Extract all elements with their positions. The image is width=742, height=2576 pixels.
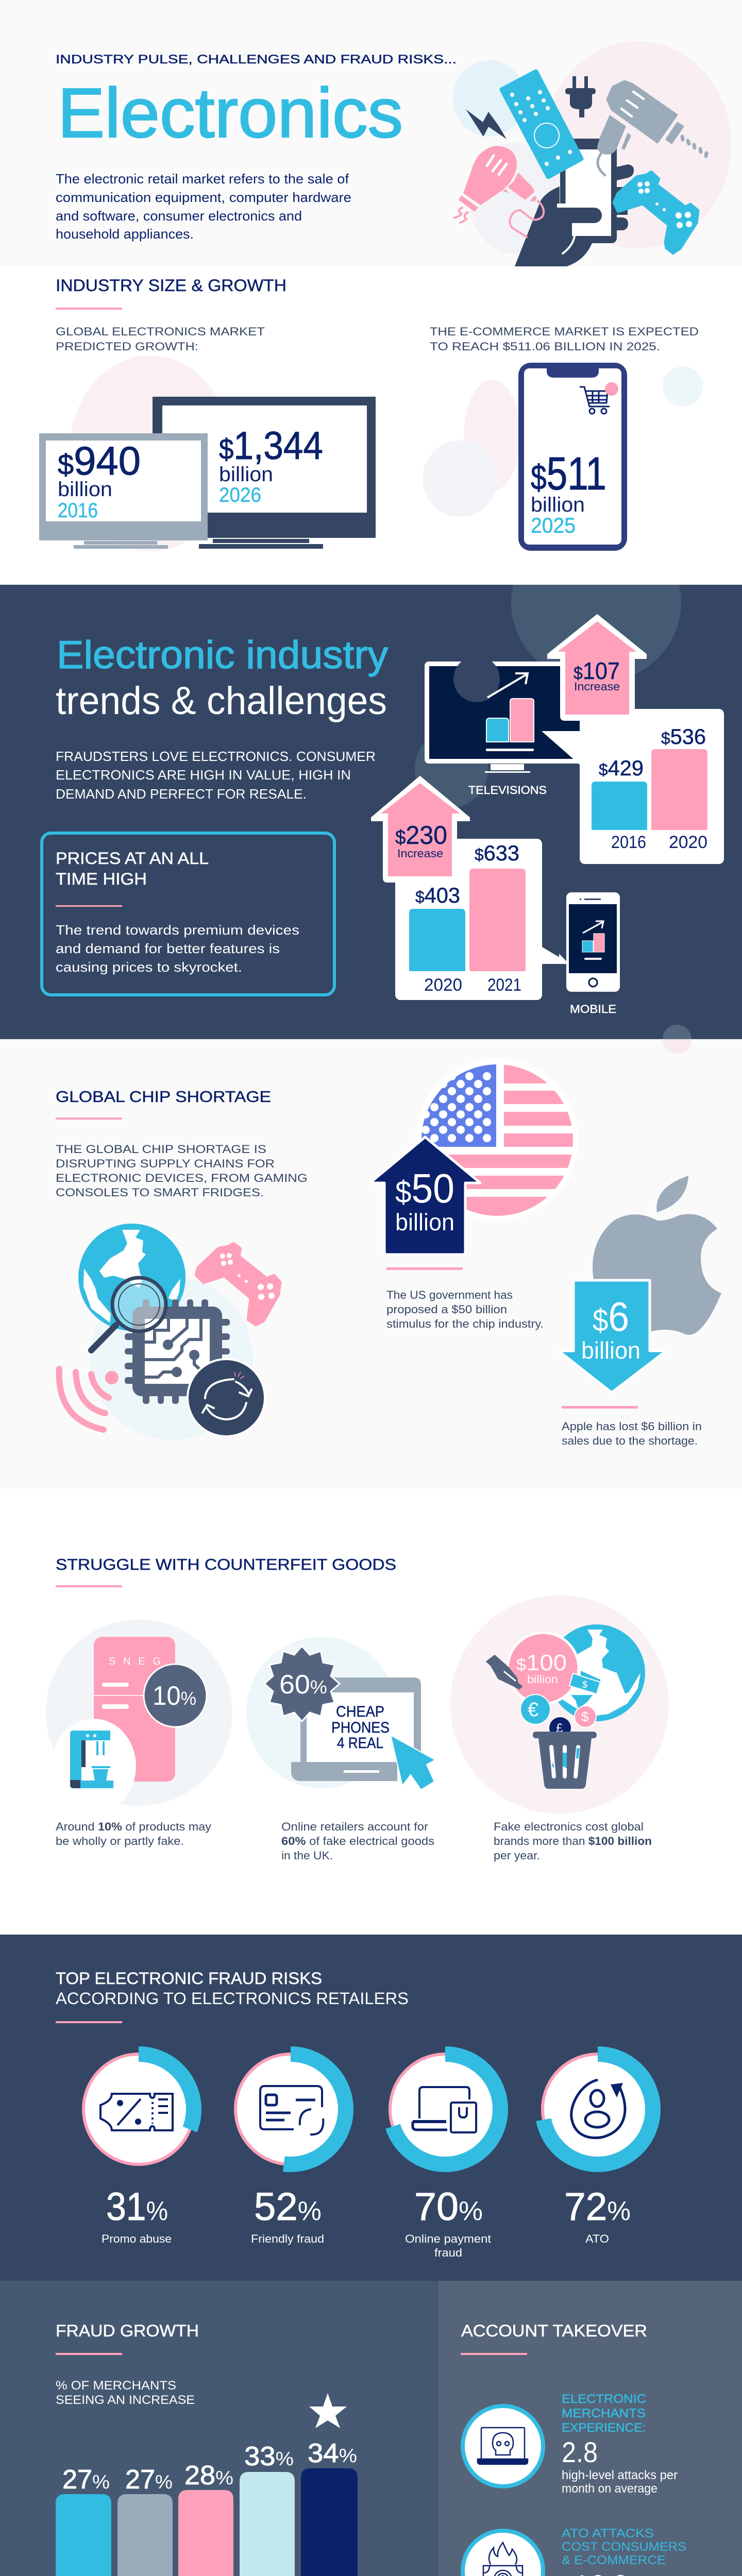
- bar: account takeover: [299, 2438, 358, 2576]
- right intro: THE E-COMMERCE MARKET IS EXPECTED: [430, 325, 699, 338]
- monitor 2026: [153, 397, 376, 549]
- illustration: fake online shop: 4 REAL: [337, 1735, 383, 1752]
- icon: television: TELEVISIONS: [468, 784, 547, 796]
- chart: television prices: $536: [661, 724, 706, 749]
- caption: 60 percent: [281, 1820, 434, 1862]
- arrow: 50 billion stimulus: $50: [395, 1165, 454, 1211]
- stat: high-level attacks: MERCHANTS: [562, 2406, 646, 2420]
- stat: cost of ATO: ATO ATTACKS: [562, 2527, 654, 2540]
- icon: shopping cart: [580, 387, 610, 414]
- bar: promo abuse: 28%: [184, 2461, 233, 2490]
- icon: devices: [413, 2087, 476, 2132]
- bar: refund abuse: [239, 2442, 295, 2576]
- section: trends and challenges: [0, 585, 742, 1039]
- heading: FRAUD GROWTH: [56, 2321, 199, 2340]
- monitor 2026: billion: [219, 463, 273, 486]
- icon: mobile phone: MOBILE: [570, 1003, 616, 1015]
- intro text: CONSOLES TO SMART FRIDGES.: [56, 1186, 264, 1199]
- icon: drill: [597, 81, 706, 175]
- stat: high-level attacks: EXPERIENCE:: [562, 2421, 646, 2435]
- intro text: [56, 1143, 308, 1199]
- icon: credit card: [260, 2086, 323, 2134]
- intro text: The electronic retail market refers to the sale of: [56, 171, 349, 187]
- caption: 100 billion: [494, 1820, 652, 1862]
- badge: 60 percent: [264, 1646, 340, 1721]
- phone illustration: $511: [531, 448, 606, 500]
- panel: prices at an all time high: [42, 833, 334, 995]
- caption: 60 percent: in the UK.: [281, 1849, 333, 1862]
- intro text: FRAUDSTERS LOVE ELECTRONICS. CONSUMER: [56, 749, 376, 764]
- arrow: 107 dollar increase: Increase: [574, 680, 620, 693]
- illustration: fake fridge: [46, 1619, 232, 1814]
- intro text: DISRUPTING SUPPLY CHAINS FOR: [56, 1157, 275, 1170]
- icon: bank note: [569, 1673, 600, 1694]
- icon: reload: [188, 1359, 265, 1436]
- arrow: 6 billion loss: [559, 1280, 666, 1393]
- coin: 100 billion: [508, 1633, 579, 1704]
- icon: controller: [195, 1243, 281, 1326]
- right intro: TO REACH $511.06 BILLION IN 2025.: [430, 340, 660, 353]
- stat: high-level attacks: month on average: [562, 2482, 657, 2496]
- heading: Electronic industry: [57, 633, 388, 677]
- stat: cost of ATO: & E-COMMERCE: [562, 2553, 666, 2567]
- coin: 100 billion: billion: [527, 1673, 558, 1686]
- icon: bank note: $: [582, 1680, 587, 1690]
- donut: ATO 72 percent: 72%: [564, 2185, 631, 2229]
- monitors illustration: [39, 355, 376, 551]
- bar: friendly fraud: 27%: [125, 2465, 173, 2495]
- chart: mobile prices: $633: [475, 841, 519, 865]
- donut: promo abuse 31 percent: 31%: [106, 2185, 168, 2229]
- intro text: [56, 749, 376, 802]
- monitor 2016: 2016: [58, 499, 98, 522]
- donut: online payment fraud 70 percent: fraud: [434, 2246, 462, 2259]
- caption: 100 billion: per year.: [494, 1849, 540, 1862]
- icon: plug: [565, 76, 596, 117]
- arrow: 6 billion loss: billion: [581, 1337, 640, 1364]
- panel: prices at an all time high: causing prices to skyrocket.: [56, 959, 242, 975]
- heading: ACCORDING TO ELECTRONICS RETAILERS: [56, 1989, 409, 2008]
- stat: high-level attacks: high-level attacks per: [562, 2468, 678, 2482]
- coin: 100 billion: $100: [516, 1650, 567, 1675]
- phone illustration: [423, 363, 703, 551]
- callout: stimulus text: The US government has: [386, 1289, 513, 1301]
- caption: 100 billion: brands more than $100 billion: [494, 1835, 652, 1848]
- icon: trash bin: [533, 1732, 597, 1789]
- stat: cost of ATO: COST CONSUMERS: [562, 2540, 686, 2554]
- donut: ATO 72 percent: ATO: [585, 2232, 609, 2245]
- icon: globe: [548, 1624, 645, 1721]
- subheading: % OF MERCHANTS: [56, 2379, 176, 2393]
- monitor 2016: $940: [58, 438, 141, 483]
- heading: [56, 1969, 409, 2023]
- callout: apple text: sales due to the shortage.: [562, 1434, 698, 1447]
- chip illustration: [59, 1224, 281, 1440]
- arrow: 50 billion stimulus: billion: [395, 1209, 454, 1235]
- callout: stimulus text: [386, 1267, 544, 1330]
- bar: refund abuse: 33%: [244, 2442, 294, 2471]
- icon: wifi waves: [59, 1369, 119, 1430]
- caption: 100 billion: Fake electronics cost global: [494, 1820, 644, 1833]
- badge: 60 percent: 60%: [279, 1670, 327, 1700]
- icon: microchip: [125, 1299, 230, 1404]
- panel: prices at an all time high: and demand for better features is: [56, 941, 280, 956]
- left intro: GLOBAL ELECTRONICS MARKET: [56, 325, 265, 338]
- illustration: fake online shop: [246, 1637, 435, 1790]
- subheading: [56, 2379, 195, 2407]
- icon: television: [425, 656, 584, 796]
- icon: remote control: [502, 72, 581, 177]
- intro text: and software, consumer electronics and: [56, 208, 302, 224]
- heading: [56, 633, 388, 723]
- flag circle: [421, 1064, 573, 1216]
- intro text: DEMAND AND PERFECT FOR RESALE.: [56, 786, 307, 802]
- phone illustration: billion: [531, 494, 585, 516]
- icon: hacked laptop: [463, 2406, 543, 2486]
- callout: stimulus text: proposed a $50 billion: [386, 1303, 507, 1316]
- monitor 2016: billion: [58, 478, 112, 501]
- right intro: [430, 325, 699, 353]
- bar: card not present: 27%: [62, 2465, 110, 2495]
- section: global chip shortage: [56, 1039, 721, 1447]
- donut: online payment fraud 70 percent: 70%: [414, 2185, 483, 2229]
- icon: hand holding phone: [515, 139, 634, 266]
- arrow: 230 dollar increase: [372, 776, 469, 882]
- section: hero: [0, 0, 742, 266]
- arrow: 107 dollar increase: $107: [574, 657, 620, 684]
- chart: mobile prices: $403: [415, 883, 460, 907]
- heading: INDUSTRY SIZE & GROWTH: [56, 276, 286, 295]
- chart: television prices: [542, 709, 724, 864]
- icon: coins: £: [556, 1721, 563, 1735]
- panel: prices at an all time high: The trend towards premium devices: [56, 922, 299, 938]
- chart: television prices: 2020: [669, 833, 707, 852]
- left intro: PREDICTED GROWTH:: [56, 340, 198, 353]
- icon: coins: $: [581, 1709, 589, 1724]
- chart: mobile prices: 2021: [487, 975, 521, 995]
- icon: coupon: [100, 2094, 173, 2130]
- intro text: communication equipment, computer hardware: [56, 190, 351, 205]
- donut: ATO 72 percent: [543, 2054, 653, 2245]
- arrow: 6 billion loss: $6: [593, 1294, 629, 1340]
- donut: friendly fraud 52 percent: Friendly fraud: [251, 2232, 324, 2245]
- section: account takeover: [439, 2281, 742, 2576]
- icon: lightning: [466, 109, 507, 139]
- phone illustration: 2025: [531, 513, 576, 537]
- bar: promo abuse: [178, 2461, 233, 2576]
- donut: friendly fraud 52 percent: [235, 2054, 346, 2245]
- icon: globe: [78, 1224, 185, 1331]
- bar: friendly fraud: [117, 2465, 173, 2576]
- panel: prices at an all time high: PRICES AT AN ALL: [56, 849, 209, 868]
- heading: STRUGGLE WITH COUNTERFEIT GOODS: [56, 1555, 396, 1573]
- icon: burning money: [463, 2531, 543, 2576]
- callout: stimulus text: stimulus for the chip industry.: [386, 1317, 544, 1330]
- title: Electronics: [58, 74, 403, 152]
- caption: 10 percent: be wholly or partly fake.: [56, 1835, 184, 1848]
- caption: 10 percent: [56, 1820, 211, 1848]
- arrow: 230 dollar increase: Increase: [397, 847, 443, 860]
- donut: promo abuse 31 percent: [83, 2054, 194, 2245]
- caption: 10 percent: Around 10% of products may: [56, 1820, 211, 1833]
- chart: television prices: $429: [599, 756, 644, 780]
- monitor 2026: $1,344: [219, 424, 323, 468]
- section: counterfeit goods: [0, 1489, 742, 1935]
- heading: GLOBAL CHIP SHORTAGE: [56, 1088, 271, 1106]
- callout: apple text: Apple has lost $6 billion in: [562, 1420, 702, 1433]
- heading: trends & challenges: [56, 679, 387, 723]
- chart: mobile prices: 2020: [424, 975, 462, 995]
- chart: television prices: 2016: [611, 833, 646, 852]
- intro text: [56, 171, 351, 242]
- stat: high-level attacks: ELECTRONIC: [562, 2392, 646, 2406]
- icon: coins: [520, 1694, 596, 1739]
- section: industry size and growth: [0, 266, 742, 585]
- arrow: 230 dollar increase: $230: [395, 821, 447, 850]
- donut: promo abuse 31 percent: Promo abuse: [102, 2232, 172, 2245]
- caption: 60 percent: 60% of fake electrical goods: [281, 1835, 434, 1848]
- bar: account takeover: 34%: [308, 2438, 357, 2468]
- icon: account user: [571, 2080, 625, 2138]
- stat: cost of ATO: [562, 2527, 693, 2576]
- bar chart: [56, 2438, 358, 2576]
- section: top fraud risks: [0, 1935, 742, 2281]
- callout: apple text: [562, 1406, 702, 1447]
- icon: hand: [486, 1655, 522, 1689]
- monitor 2016: [39, 433, 208, 549]
- arrow: 50 billion stimulus: [370, 1137, 480, 1255]
- bar: card not present: [56, 2465, 111, 2576]
- icon: game controller: [613, 171, 699, 254]
- intro text: ELECTRONIC DEVICES, FROM GAMING: [56, 1172, 308, 1184]
- icon: coffee machine: [70, 1731, 113, 1788]
- section: fraud growth: [0, 2281, 439, 2576]
- illustration: cost of fakes: [450, 1595, 669, 1814]
- panel: prices at an all time high: TIME HIGH: [56, 870, 147, 888]
- illustration: fake fridge: 10%: [153, 1681, 196, 1711]
- icon: hair dryer: [454, 146, 544, 237]
- illustration: fake fridge: S N E G: [109, 1656, 161, 1667]
- donut: online payment fraud 70 percent: Online payment: [405, 2232, 491, 2245]
- icon: cursor: [391, 1735, 435, 1790]
- subheading: SEEING AN INCREASE: [56, 2393, 195, 2407]
- illustration: fake online shop: CHEAP: [336, 1703, 384, 1720]
- icon: apple logo: [593, 1176, 721, 1335]
- stat: high-level attacks: 2.8: [562, 2436, 598, 2468]
- icon: magnifier: [91, 1278, 166, 1350]
- donut: online payment fraud 70 percent: [390, 2054, 500, 2259]
- intro text: ELECTRONICS ARE HIGH IN VALUE, HIGH IN: [56, 767, 351, 783]
- illustration: fake online shop: PHONES: [331, 1719, 390, 1736]
- icon: mobile phone: [559, 892, 620, 1015]
- intro text: THE GLOBAL CHIP SHORTAGE IS: [56, 1143, 266, 1156]
- kicker: INDUSTRY PULSE, CHALLENGES AND FRAUD RISKS...: [56, 53, 457, 66]
- caption: 60 percent: Online retailers account for: [281, 1820, 428, 1833]
- monitor 2026: 2026: [219, 484, 261, 506]
- arrow: 107 dollar increase: [548, 615, 646, 720]
- intro text: household appliances.: [56, 226, 194, 242]
- hero illustration: [453, 41, 731, 266]
- heading: TOP ELECTRONIC FRAUD RISKS: [56, 1969, 322, 1988]
- stat: high-level attacks: [562, 2392, 678, 2496]
- donut: friendly fraud 52 percent: 52%: [254, 2185, 322, 2229]
- icon: star: [309, 2393, 347, 2428]
- left intro: [56, 325, 265, 353]
- heading: ACCOUNT TAKEOVER: [461, 2321, 647, 2340]
- chart: mobile prices: [395, 839, 570, 1000]
- icon: coins: €: [528, 1699, 538, 1721]
